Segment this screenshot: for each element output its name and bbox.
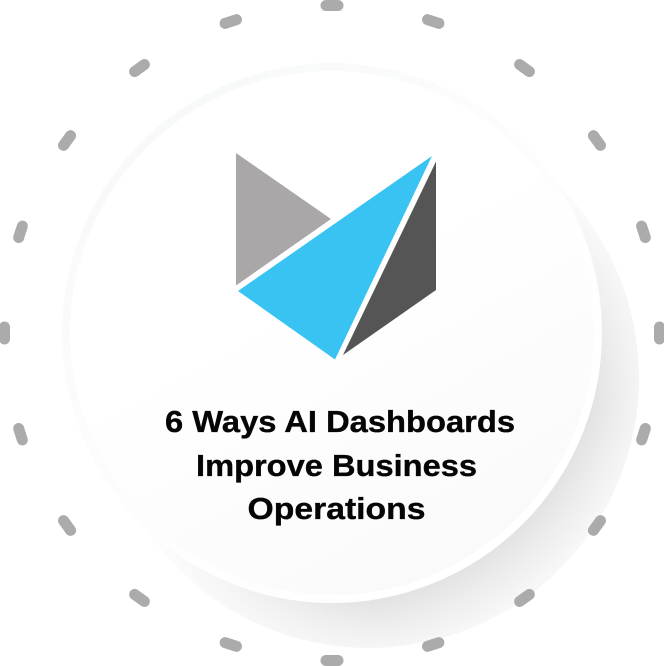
title: 6 Ways AI Dashboards: [165, 404, 515, 439]
logo: dark triangle: [343, 162, 436, 355]
logo: grey triangle: [236, 153, 331, 286]
logo: blue triangle: [238, 156, 432, 360]
title: Operations: [248, 491, 426, 526]
disc drop shadow: [206, 232, 639, 648]
title: [165, 404, 515, 526]
title: Improve Business: [196, 448, 477, 483]
icon: logo: [236, 153, 436, 360]
main disc: [66, 67, 598, 599]
